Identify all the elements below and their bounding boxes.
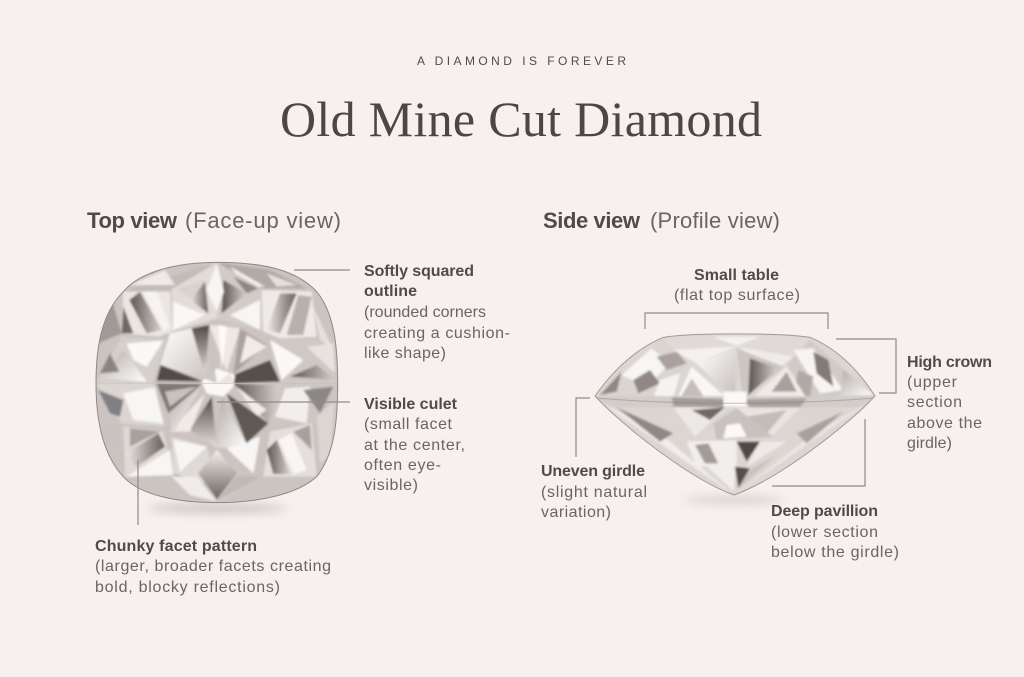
callout: softly squared outline: (rounded corners	[364, 304, 486, 321]
callout: softly squared outline	[294, 263, 510, 362]
callout: visible culet: (small facet	[364, 416, 453, 433]
callout: high crown: girdle)	[907, 435, 952, 452]
callout: uneven girdle: variation)	[541, 504, 611, 521]
heading: top view: Top view	[87, 208, 178, 233]
callout: uneven girdle: (slight natural	[541, 484, 647, 501]
callout: softly squared outline: like shape)	[364, 345, 446, 362]
heading: side view: Side view	[543, 208, 641, 233]
callout: softly squared outline: creating a cushion-	[364, 325, 510, 342]
callout: small table: Small table	[694, 267, 779, 284]
callout: deep pavillion: (lower section	[771, 524, 878, 541]
callout: visible culet	[217, 396, 465, 494]
eyebrow heading: A DIAMOND IS FOREVER	[417, 54, 626, 68]
callout: visible culet: visible)	[364, 477, 418, 494]
callout: visible culet: often eye-	[364, 457, 441, 474]
callout: high crown: above the	[907, 415, 982, 432]
callout: chunky facet pattern: Chunky facet pattern	[95, 538, 257, 555]
heading: top view	[87, 208, 341, 233]
callout: uneven girdle	[541, 398, 647, 521]
callout: softly squared outline: outline	[364, 283, 417, 300]
callout: chunky facet pattern	[95, 460, 331, 596]
callout: high crown: (upper	[907, 374, 958, 391]
callout: high crown: High crown	[907, 354, 992, 371]
callout: deep pavillion	[771, 419, 899, 561]
diamond: side view	[594, 333, 876, 507]
heading: side view: (Profile view)	[650, 208, 780, 233]
title: Old Mine Cut Diamond	[280, 91, 762, 147]
girdle band	[595, 396, 875, 407]
callout: small table	[645, 267, 828, 329]
heading: top view: (Face-up view)	[185, 208, 341, 233]
callout: uneven girdle: Uneven girdle	[541, 463, 645, 480]
corners	[122, 292, 172, 337]
callout: high crown	[836, 339, 992, 452]
heading: side view	[543, 208, 780, 233]
diamond: top view	[90, 250, 350, 513]
callout: deep pavillion: Deep pavillion	[771, 503, 878, 520]
callout: visible culet: at the center,	[364, 437, 465, 454]
callout: small table: (flat top surface)	[674, 287, 800, 304]
left and right kites	[96, 337, 165, 383]
pavilion	[605, 404, 724, 488]
culet star	[202, 368, 235, 397]
table facets	[697, 352, 736, 392]
callout: visible culet: Visible culet	[364, 396, 458, 413]
centre ring	[160, 328, 202, 376]
callout: chunky facet pattern: (larger, broader facets creating	[95, 558, 331, 575]
callout: softly squared outline: Softly squared	[364, 263, 474, 280]
callout: high crown: section	[907, 394, 962, 411]
crown	[663, 337, 810, 357]
callout: chunky facet pattern: bold, blocky reflections)	[95, 579, 280, 596]
callout: deep pavillion: below the girdle)	[771, 544, 899, 561]
